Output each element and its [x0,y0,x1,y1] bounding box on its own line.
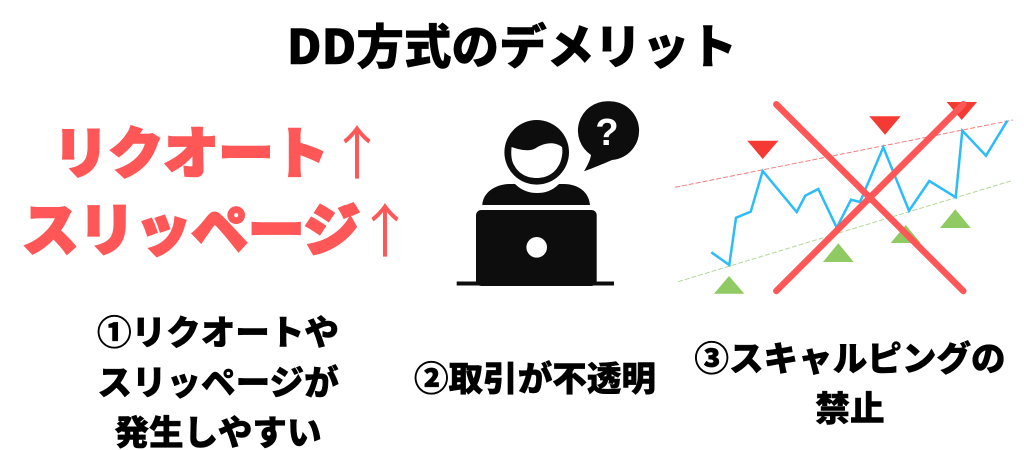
title: DD方式のデメリット [287,9,737,78]
text: slippage up arrow: ↑ [356,185,414,269]
chart: trend channel crossed out [675,101,1014,294]
panel: requote and slippage increase [22,107,414,269]
text: requote up arrow: ↑ [328,107,386,191]
caption 3: ③スキャルピングの [694,331,1006,381]
icon: laptop [476,210,597,286]
icon: shoulders [482,184,590,205]
caption 1: ①リクオートや [97,305,339,355]
red sell markers [747,102,977,159]
caption 3: 禁止 [815,381,885,431]
text: slippage: スリッページ [22,185,360,267]
icon: head [504,120,569,185]
icon: speech bubble: ? [595,112,619,154]
caption 2: ②取引が不透明 [414,351,656,401]
caption 1 [97,305,339,450]
caption 1: スリッページが [97,355,339,405]
caption 3 [694,331,1006,431]
red cross [776,104,963,291]
green buy markers [714,209,971,294]
icon: person at laptop with question bubble [456,101,640,286]
text: requote: リクオート [53,109,328,189]
icon: table line [457,282,614,286]
icon: speech bubble [578,101,639,171]
price line [711,121,1007,265]
upper resistance line [675,120,1013,187]
lower support line [678,181,1011,282]
